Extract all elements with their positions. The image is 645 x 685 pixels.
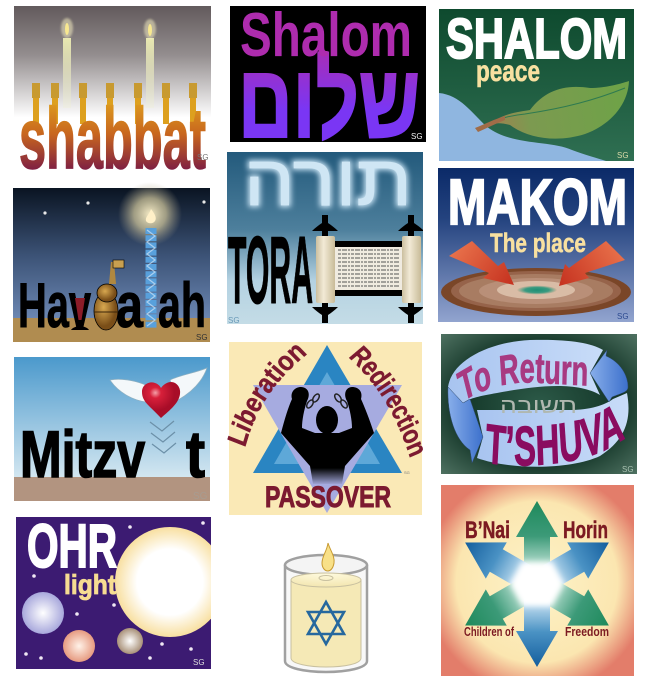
panel: B'nai Horin [441,485,634,676]
signature: SG [193,491,208,502]
icon: braided candle [147,228,155,328]
heading: Havdalah letters: Hav [18,271,91,341]
icon: stars [43,200,206,215]
subheading: light: light [64,569,116,600]
water [439,93,606,161]
arrow: left blue [448,387,483,463]
signature: SG [197,153,209,162]
arrow: right [559,241,625,286]
band: top [448,340,603,403]
icon: glowing centre [510,562,564,606]
text: Redirection: Redirection [348,345,423,458]
panel: Shabbat [14,6,211,187]
heading: PASSOVER: PASSOVER [265,481,391,514]
signature: SG [404,470,410,475]
glass [285,565,367,672]
icon: six arrows [455,501,619,667]
heading: t: t [186,417,205,491]
icon: man breaking chains [281,387,374,484]
signature: SG [411,132,423,141]
panel: Passover [227,342,423,515]
heading: shabbat: shabbat [19,91,206,187]
signature: SG [228,316,240,325]
icon: Torah scroll [312,215,424,323]
panel: Havdalah [13,182,210,342]
panel: Makom [438,166,634,322]
text: B'Nai: B’Nai [465,517,510,544]
panel: Tora [227,141,424,325]
heading: Mitzv: Mitzv [20,417,145,491]
text: Liberation: Liberation [227,345,307,447]
panel: Shalom black [230,1,426,160]
icon: winged heart [110,368,207,418]
wax body [291,580,361,667]
signature: SG [617,312,629,321]
star of David [308,602,344,644]
text: T'SHUVA: T’SHUVA [486,406,626,466]
Hebrew: shalom: שלום [238,44,420,160]
text: Horin: Horin [563,517,608,544]
text: Children of: Children of [464,624,514,639]
icon: wine glass in the v [71,298,89,330]
icon: planet lavender [22,592,64,634]
Hebrew: Torah glowing [244,156,412,212]
icon: menorah cups and stems [32,83,197,124]
signature: SG [617,151,629,160]
heading: Havdalah letters: ah [158,271,206,341]
panel: Mitzvot [14,357,210,502]
icon: spice box [94,260,124,330]
icon: planet tan [117,628,143,654]
heading: Havdalah letters: a [116,271,144,341]
icon: stars [24,521,205,660]
band: bottom [477,393,629,467]
signature: SG [196,333,208,342]
arrow: left [449,241,514,285]
heading: OHR: OHR [27,512,117,580]
Hebrew: Torah glowing: תורה [244,141,412,221]
icon: planet pink [63,630,95,662]
icon: star of David [253,345,402,513]
flame [322,543,334,571]
panel: Tora: TORA [228,217,313,324]
icon: two lit candles [61,18,156,108]
text: Freedom: Freedom [565,624,609,639]
icon: candle glow and flame [118,182,182,246]
panel: OHR [16,512,225,669]
signature: SG [193,658,205,667]
signature: SG [622,465,634,474]
panel: T'shuva [441,334,637,474]
subheading: peace: peace [476,55,540,88]
Hebrew: Teshuvah: תשובה [500,393,577,418]
subheading: The place: The place [490,228,586,258]
text: To Return: To Return [456,354,587,398]
icon: downward chevrons [150,421,176,453]
wick pool [319,576,333,580]
icon: concentric ground rings [441,268,631,316]
icon: sun [115,527,211,637]
icon: leaf [475,81,629,139]
icon: memorial candle [285,543,367,672]
heading: Havdalah letters [18,271,206,341]
Hebrew: Torah glowing: תורה [244,141,412,221]
panel: Shalom peace [439,7,634,161]
arrow: right blue [590,350,628,402]
heading: Shalom: Shalom [240,1,412,70]
